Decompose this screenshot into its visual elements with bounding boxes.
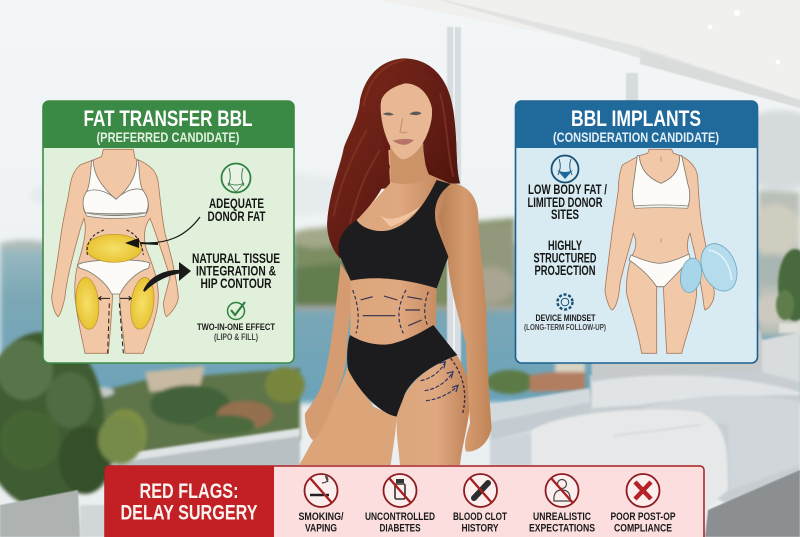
ceiling: [378, 0, 800, 108]
icon: low body fat: [552, 156, 578, 182]
item: blood clot: HISTORY: [462, 522, 499, 534]
hills behind figure: [294, 218, 515, 312]
text: structured projection: PROJECTION: [534, 263, 596, 278]
item: diabetes: [365, 474, 435, 534]
planter: [0, 490, 80, 537]
text: natural tissue integration: [192, 251, 280, 291]
text: two-in-one effect: (LIPO & FILL): [214, 332, 258, 342]
text: adequate donor fat: [208, 196, 266, 224]
item: blood clot: BLOOD CLOT: [453, 511, 507, 523]
item: poor compliance: COMPLIANCE: [614, 522, 672, 534]
panel: fat transfer BBL: [43, 101, 294, 363]
sports top: [338, 180, 451, 288]
text: two-in-one effect: [197, 322, 275, 342]
item: blood clot: [453, 474, 507, 534]
left arm and hand: [305, 263, 353, 440]
red flags label block: [105, 466, 274, 537]
text: low body fat: LIMITED DONOR: [528, 195, 603, 210]
hair front: [327, 70, 460, 258]
arrow: to hip contour: [144, 262, 191, 291]
plant left: [0, 332, 142, 508]
item: unrealistic expectations: EXPECTATIONS: [529, 522, 595, 534]
text: low body fat: SITES: [551, 207, 579, 222]
central figure: woman with surgical markings: [299, 58, 492, 465]
text: natural tissue integration: HIP CONTOUR: [200, 276, 272, 291]
heading: fat transfer: FAT TRANSFER BBL: [84, 106, 252, 131]
heading: red flags: [120, 480, 258, 524]
hip markings: [421, 358, 465, 413]
item: unrealistic expectations: [529, 474, 595, 534]
text: two-in-one effect: TWO-IN-ONE EFFECT: [197, 322, 275, 333]
illustration: body with fat zones: [52, 149, 178, 353]
panel header: [515, 101, 758, 148]
item: diabetes: UNCONTROLLED: [365, 511, 435, 523]
window frames: [447, 27, 461, 402]
sofa: [532, 330, 800, 510]
hair back: [327, 58, 460, 258]
right arm and hand: [438, 183, 492, 452]
text: low body fat: [528, 182, 607, 222]
left leg: [299, 367, 397, 465]
right leg: [397, 355, 470, 465]
heading: red flags: RED FLAGS:: [140, 480, 238, 503]
text: structured projection: HIGHLY: [548, 238, 582, 253]
icon: gear: [558, 294, 572, 310]
text: natural tissue integration: INTEGRATION &: [196, 264, 276, 278]
heading: BBL implants: BBL IMPLANTS: [571, 106, 701, 131]
abdomen markings: [353, 290, 428, 333]
briefs: [347, 325, 457, 417]
text: structured projection: [534, 238, 597, 278]
torso: [338, 150, 450, 357]
item: smoking: SMOKING/: [298, 511, 344, 523]
item: smoking: [298, 474, 344, 534]
panel: red flags banner: [105, 466, 704, 537]
text: adequate donor fat: DONOR FAT: [208, 209, 266, 224]
panel header: [43, 101, 294, 148]
item: poor compliance: [610, 474, 676, 534]
foreground foliage and town: [85, 362, 585, 465]
icon: donor fat body: [222, 164, 250, 192]
panel: BBL implants: [515, 101, 758, 363]
illustration: slim body with implants: [605, 149, 744, 353]
subheading: preferred candidate: (PREFERRED CANDIDATE): [96, 129, 240, 145]
subheading: consideration candidate: (CONSIDERATION CANDIDATE): [553, 129, 719, 145]
text: structured projection: STRUCTURED: [534, 250, 597, 266]
item: poor compliance: POOR POST-OP: [610, 511, 676, 523]
face: [381, 80, 432, 184]
text: device mindset: [524, 313, 606, 332]
arrow: donor fat to abdomen: [125, 217, 200, 248]
text: adequate donor fat: ADEQUATE: [209, 196, 264, 211]
floor: [705, 470, 800, 537]
railing: [80, 388, 592, 537]
text: device mindset: (LONG-TERM FOLLOW-UP): [524, 322, 606, 332]
plant right: [776, 249, 800, 333]
text: device mindset: DEVICE MINDSET: [536, 313, 596, 324]
item: unrealistic expectations: UNREALISTIC: [533, 511, 591, 523]
icon: check mark: [228, 302, 245, 320]
text: low body fat: LOW BODY FAT /: [528, 182, 607, 197]
item: diabetes: DIABETES: [380, 522, 420, 534]
heading: red flags: DELAY SURGERY: [120, 502, 258, 524]
text: natural tissue integration: NATURAL TISSUE: [192, 251, 280, 266]
item: smoking: VAPING: [305, 522, 337, 534]
